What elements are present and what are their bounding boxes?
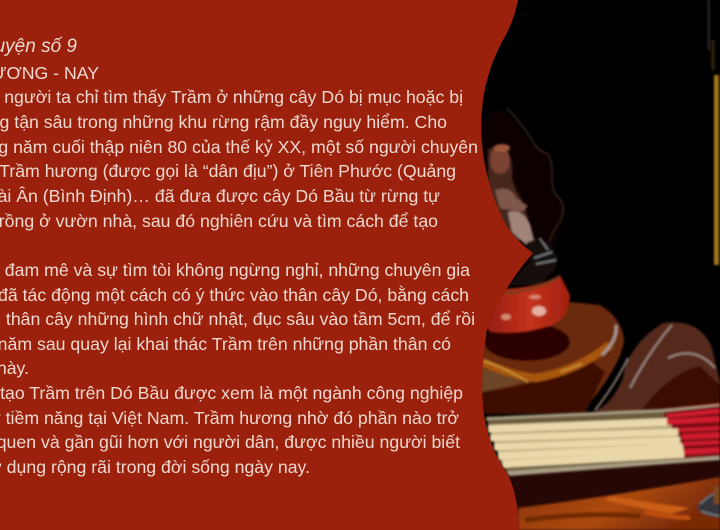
incense stick at right edge <box>708 0 720 265</box>
red bowl <box>480 275 570 333</box>
paragraph 2 <box>0 260 475 378</box>
paragraph 3 <box>0 383 463 477</box>
bundle of incense sticks <box>486 404 720 476</box>
text block: story <box>0 36 478 477</box>
wooden stand <box>480 302 720 414</box>
paragraph 1 <box>0 87 478 231</box>
carved statue <box>478 108 566 285</box>
dark shadow band under sticks <box>480 460 720 530</box>
wooden table <box>518 477 720 530</box>
